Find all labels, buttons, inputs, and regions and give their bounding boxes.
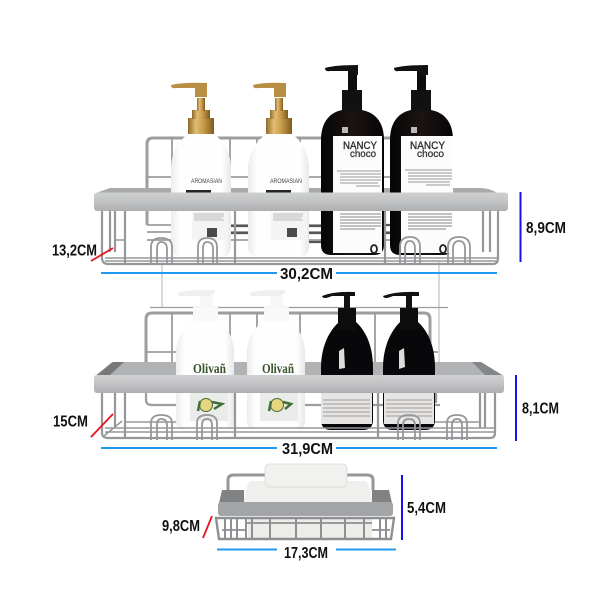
top rack front basket and hooks — [102, 211, 498, 265]
middle rack back wire frame — [146, 308, 448, 405]
top rack — [94, 65, 508, 362]
top rack dimensions — [52, 192, 566, 283]
height marker 5,4CM: 5,4CM — [407, 500, 446, 517]
white pump bottle 2 — [248, 83, 309, 257]
white lotion bottle 2 — [247, 290, 305, 431]
folded towel — [244, 464, 372, 503]
middle rack tray back — [95, 362, 504, 376]
black pump bottle 1 — [321, 65, 384, 255]
white lotion bottle 2: Olivañ — [262, 362, 294, 377]
soap dish basket — [216, 517, 394, 540]
middle rack dimensions — [53, 375, 559, 458]
height marker 8,1CM — [516, 375, 559, 441]
black pump bottle 2: choco — [417, 148, 444, 160]
height marker 8,1CM: 8,1CM — [522, 400, 559, 418]
black pump bottle 2: NANCY — [410, 140, 446, 152]
height marker 8,9CM: 8,9CM — [526, 220, 566, 237]
middle rack front bar — [94, 375, 504, 393]
soap dish tray and front bar — [218, 490, 393, 516]
black pump bottle 1: choco — [350, 148, 376, 160]
depth marker 15CM: 15CM — [53, 414, 88, 430]
soap dish — [216, 464, 394, 540]
height marker 5,4CM — [402, 475, 446, 540]
black amber bottle 2 — [383, 292, 435, 430]
white pump bottle 1 — [171, 83, 231, 257]
depth marker 9,8CM: 9,8CM — [162, 518, 200, 535]
height marker 8,9CM — [520, 192, 566, 262]
soap dish handle — [228, 475, 373, 490]
depth marker 15CM — [53, 414, 113, 437]
white pump bottle 2: AROMASIAN — [270, 179, 302, 185]
white pump bottle 1: AROMASIAN — [191, 179, 222, 185]
top rack tray back — [96, 188, 497, 193]
white lotion bottle 1: Olivañ — [193, 362, 226, 377]
top rack back wire frame — [147, 138, 450, 242]
middle rack front basket and hooks — [102, 393, 495, 440]
width marker 31,9CM: 31,9CM — [282, 441, 333, 458]
middle rack — [94, 290, 504, 440]
black pump bottle 1: NANCY — [343, 140, 378, 152]
soap dish dimensions — [162, 475, 446, 562]
width marker 17,3CM: 17,3CM — [284, 545, 328, 562]
connecting wires — [162, 262, 439, 362]
top rack front bar — [94, 192, 508, 211]
black amber bottle 1 — [321, 292, 373, 430]
depth marker 13,2CM: 13,2CM — [52, 242, 97, 260]
width marker 30,2CM: 30,2CM — [280, 266, 333, 283]
white lotion bottle 1 — [176, 290, 234, 431]
black pump bottle 2 — [390, 65, 453, 255]
